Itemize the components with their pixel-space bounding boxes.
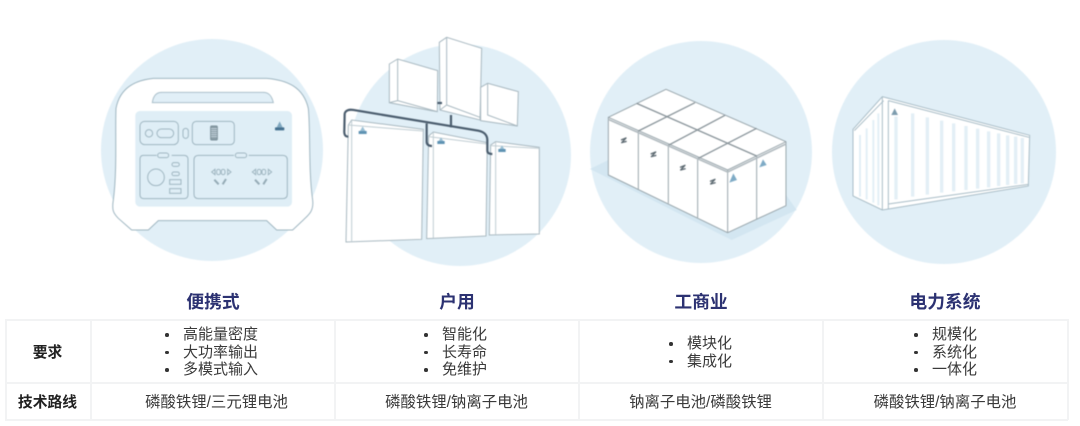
heading: 便携式: 便携式 bbox=[186, 292, 240, 312]
heading: 户用: 户用 bbox=[439, 292, 475, 312]
technology route: 户用: 磷酸铁锂/钠离子电池 bbox=[385, 394, 528, 411]
icon: home storage units bbox=[344, 37, 571, 266]
requirements: 户用 bbox=[424, 326, 487, 378]
technology route: 工商业: 钠离子电池/磷酸铁锂 bbox=[629, 394, 772, 411]
technology route: 便携式: 磷酸铁锂/三元锂电池 bbox=[145, 394, 288, 411]
requirements: 电力系统: 规模化 bbox=[932, 326, 977, 343]
icon: portable power station bbox=[101, 39, 323, 261]
requirements: 电力系统: 系统化 bbox=[932, 344, 977, 361]
requirements: 户用: 长寿命 bbox=[442, 344, 487, 361]
requirements: 电力系统 bbox=[914, 326, 977, 378]
requirements: 便携式: 大功率输出 bbox=[183, 344, 258, 361]
requirements: 便携式: 多模式输入 bbox=[183, 361, 258, 378]
requirements: 便携式: 高能量密度 bbox=[183, 326, 258, 343]
icon: grid-scale container bbox=[832, 40, 1056, 264]
requirements: 户用: 免维护 bbox=[442, 361, 487, 378]
heading: 工商业: 工商业 bbox=[674, 292, 728, 312]
row header: 要求: 要求 bbox=[33, 345, 62, 361]
requirements: 便携式 bbox=[165, 326, 258, 378]
row header: 技术路线: 技术路线 bbox=[18, 395, 77, 411]
requirements: 工商业 bbox=[669, 335, 732, 370]
icon: commercial battery cabinets bbox=[590, 41, 812, 263]
requirements: 户用: 智能化 bbox=[442, 326, 487, 343]
requirements: 工商业: 模块化 bbox=[687, 335, 732, 352]
technology route: 电力系统: 磷酸铁锂/钠离子电池 bbox=[874, 394, 1016, 411]
requirements: 电力系统: 一体化 bbox=[932, 361, 977, 378]
requirements: 工商业: 集成化 bbox=[687, 353, 732, 370]
comparison table bbox=[5, 319, 1069, 421]
heading: 电力系统: 电力系统 bbox=[909, 292, 981, 312]
